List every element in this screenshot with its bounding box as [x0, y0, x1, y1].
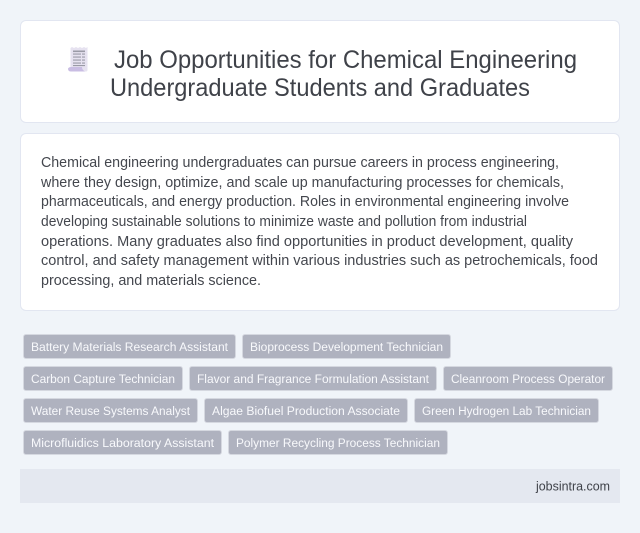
- footer: site name: jobsintra.com: [535, 480, 610, 494]
- tag: Polymer Recycling Process Technician: Polymer Recycling Process Technician: [236, 436, 440, 450]
- title: [110, 46, 577, 102]
- tag: Green Hydrogen Lab Technician: Green Hydrogen Lab Technician: [422, 404, 591, 418]
- tag: Battery Materials Research Assistant: Battery Materials Research Assistant: [31, 340, 229, 354]
- tag: Algae Biofuel Production Associate: [204, 398, 408, 423]
- tag: Cleanroom Process Operator: Cleanroom Process Operator: [451, 372, 605, 386]
- title: Undergraduate Students and Graduates: [110, 74, 530, 102]
- text block: description: pharmaceuticals, and energy production. Roles in environmental engineering involve: [41, 194, 569, 210]
- text block: description: operations. Many graduates also find opportunities in product development, quality: [41, 234, 574, 250]
- tag: Carbon Capture Technician: [23, 366, 183, 391]
- tag: Bioprocess Development Technician: [242, 334, 451, 359]
- tag: Flavor and Fragrance Formulation Assistant: Flavor and Fragrance Formulation Assistant: [197, 372, 430, 386]
- text block: description: Chemical engineering undergraduates can pursue careers in process engineering,: [41, 155, 559, 171]
- text block: description: developing sustainable solutions to minimize waste and pollution from industrial: [41, 214, 527, 230]
- icon: document scroll: [68, 47, 88, 72]
- tag: Water Reuse Systems Analyst: [23, 398, 198, 423]
- tag: Microfluidics Laboratory Assistant: Microfluidics Laboratory Assistant: [31, 436, 215, 450]
- tag: Microfluidics Laboratory Assistant: [23, 430, 222, 455]
- tag: Carbon Capture Technician: Carbon Capture Technician: [31, 372, 175, 386]
- text block: description: control, and safety management within various industries such as petrochemicals, food: [41, 253, 598, 269]
- tag: Cleanroom Process Operator: [443, 366, 613, 391]
- text block: description: processing, and materials science.: [41, 273, 261, 289]
- panel: description: [20, 133, 620, 311]
- tag: Water Reuse Systems Analyst: Water Reuse Systems Analyst: [31, 404, 191, 418]
- text block: description: [40, 155, 598, 289]
- text block: description: where they design, optimize, and scale up manufacturing processes for chemicals,: [40, 175, 564, 191]
- tag: Battery Materials Research Assistant: [23, 334, 236, 359]
- footer bar: [20, 469, 620, 503]
- tag: Bioprocess Development Technician: Bioprocess Development Technician: [250, 340, 443, 354]
- tag: Algae Biofuel Production Associate: Algae Biofuel Production Associate: [212, 404, 400, 418]
- title: Job Opportunities for Chemical Engineering: [114, 46, 577, 74]
- tag list: [23, 334, 613, 455]
- tag: Green Hydrogen Lab Technician: [414, 398, 599, 423]
- panel: header: [20, 20, 620, 123]
- tag: Polymer Recycling Process Technician: [228, 430, 448, 455]
- tag: Flavor and Fragrance Formulation Assistant: [189, 366, 437, 391]
